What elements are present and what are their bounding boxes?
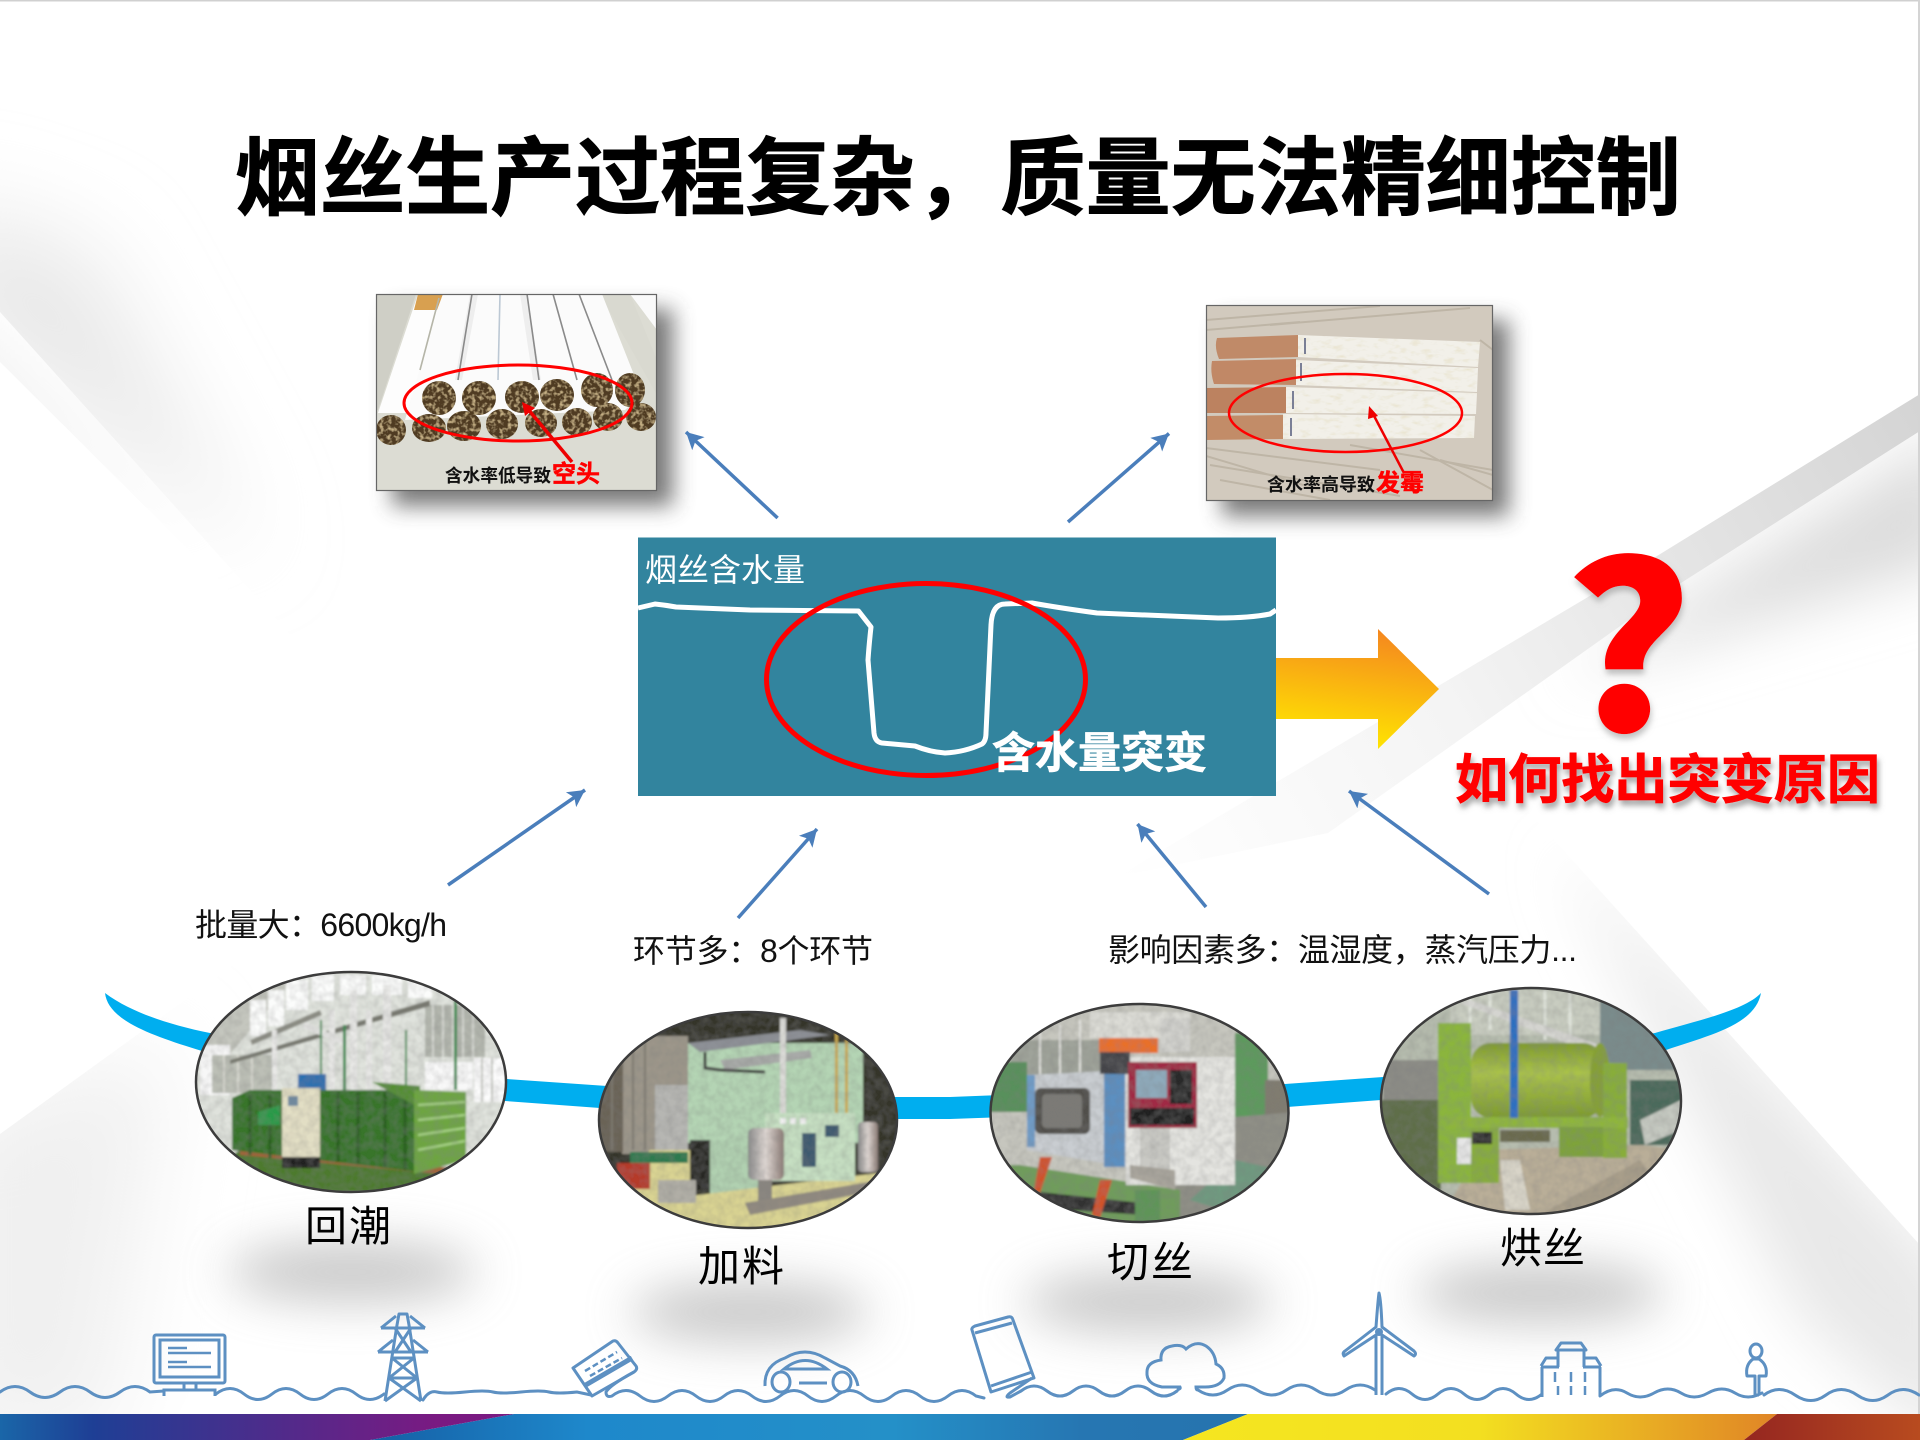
icon: tree cloud bbox=[1147, 1344, 1224, 1390]
process photo: cutting bbox=[985, 998, 1294, 1228]
panel: moisture content chart bbox=[638, 538, 1276, 796]
question mark: ? bbox=[1563, 466, 1693, 797]
blue connecting band bbox=[105, 993, 1761, 1119]
arrow: to low moisture photo bbox=[686, 432, 778, 518]
arrow: batch size factor bbox=[448, 790, 585, 885]
photo: cigarettes with empty ends caused by low moisture bbox=[376, 294, 673, 506]
icon: phone bbox=[972, 1317, 1034, 1397]
icon: wind turbine bbox=[1343, 1293, 1416, 1395]
question text: 如何找出突变原因 bbox=[1455, 751, 1880, 810]
text: influencing factors: 影响因素多：温湿度，蒸汽压力... bbox=[1108, 932, 1577, 968]
icon: monitor bbox=[154, 1335, 225, 1396]
red ellipse highlighting abrupt change bbox=[766, 584, 1086, 776]
icon: person bbox=[1747, 1344, 1766, 1395]
wavy skyline line bbox=[0, 1385, 1919, 1402]
photo: moldy cigarettes caused by high moisture bbox=[1206, 305, 1509, 516]
red ellipse marker bbox=[1229, 374, 1462, 452]
photo caption: 空头 bbox=[552, 461, 600, 488]
icon: power tower bbox=[378, 1314, 428, 1401]
photo caption: 发霉 bbox=[1376, 470, 1424, 497]
text: batch size: 批量大：6600kg/h bbox=[195, 907, 447, 943]
arrow: to high moisture photo bbox=[1068, 434, 1169, 522]
process photo: casing bbox=[593, 1005, 902, 1234]
chart label: 烟丝含水量 bbox=[645, 552, 805, 588]
icon: bank card bbox=[573, 1341, 637, 1396]
label: drying: 烘丝 bbox=[1500, 1225, 1585, 1272]
label: cutting: 切丝 bbox=[1107, 1239, 1193, 1286]
photo caption: 含水率低导致 bbox=[445, 465, 551, 486]
red ellipse marker bbox=[404, 365, 632, 441]
process photo: conditioning bbox=[190, 966, 512, 1198]
icon: building bbox=[1541, 1343, 1601, 1397]
arrow: process steps factor bbox=[738, 829, 817, 918]
red pointer arrow bbox=[522, 402, 572, 462]
bottom colour strip bbox=[0, 1414, 1920, 1440]
process photo: drying bbox=[1375, 982, 1687, 1220]
label: conditioning: 回潮 bbox=[305, 1203, 391, 1250]
text: process steps: 环节多：8个环节 bbox=[633, 933, 873, 969]
arrow: orange result arrow bbox=[1276, 629, 1439, 749]
photo caption: 含水率高导致 bbox=[1267, 474, 1375, 495]
arrow: influencing factors bbox=[1138, 824, 1206, 907]
red pointer arrow bbox=[1368, 406, 1404, 473]
title: 烟丝生产过程复杂，质量无法精细控制 bbox=[235, 132, 1681, 227]
icon: car bbox=[765, 1352, 858, 1392]
arrow: to chart from right bbox=[1349, 791, 1489, 894]
soft shadows below process photos bbox=[227, 1242, 1665, 1342]
abrupt change label: 含水量突变 bbox=[992, 730, 1207, 778]
moisture curve bbox=[638, 603, 1276, 753]
label: casing: 加料 bbox=[698, 1243, 784, 1290]
